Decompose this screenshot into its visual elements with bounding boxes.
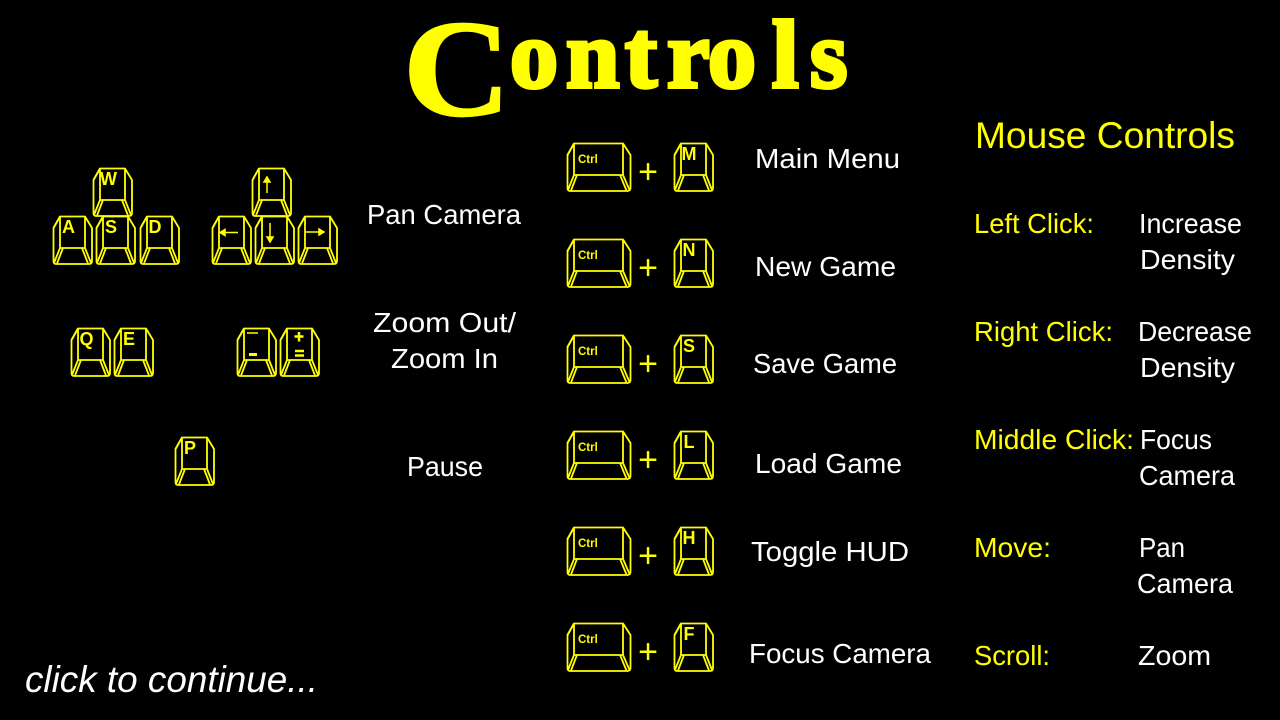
shortcut: ctrl F: F [684, 624, 694, 644]
label: toggle HUD: Toggle HUD [751, 536, 909, 567]
label: zoom: Zoom Out/ [373, 307, 516, 338]
shortcut: ctrl N: N [682, 240, 696, 260]
mouse: middle click: Middle Click: [974, 424, 1134, 455]
mouse: left click: Density [1140, 244, 1235, 275]
shortcut: ctrl L: Ctrl [578, 442, 598, 454]
shortcut: ctrl M: M [682, 144, 696, 164]
mouse: move: Camera [1137, 568, 1233, 599]
shortcut: ctrl F: + [638, 633, 658, 671]
label: new game: New Game [755, 251, 896, 282]
mouse: scroll [974, 640, 1211, 671]
keys: Q and E [72, 328, 153, 376]
title [403, 0, 847, 146]
shortcut: ctrl N [568, 240, 713, 287]
mouse: right click [974, 316, 1252, 383]
shortcut: ctrl S: Ctrl [578, 346, 598, 358]
label: focus camera: Focus Camera [749, 638, 931, 669]
shortcut: ctrl H: + [638, 537, 658, 575]
mouse: left click: Increase [1139, 208, 1242, 239]
shortcut: ctrl N: + [638, 249, 658, 287]
mouse: left click: Left Click: [974, 208, 1094, 239]
shortcut: ctrl N: Ctrl [578, 250, 598, 262]
label: zoom [373, 307, 516, 374]
mouse: right click: Right Click: [974, 316, 1113, 347]
label: pan camera: Pan Camera [367, 199, 521, 230]
heading: mouse controls: Mouse Controls [975, 115, 1235, 156]
mouse: middle click: Camera [1139, 460, 1235, 491]
mouse: right click: Decrease [1138, 316, 1252, 347]
keys: WASD: D [148, 217, 162, 237]
mouse: scroll: Zoom [1138, 640, 1211, 671]
shortcut: ctrl M: + [638, 153, 658, 191]
key: P: P [184, 438, 196, 458]
keys: Q and E: E [123, 329, 135, 349]
shortcut: ctrl L: + [638, 441, 658, 479]
mouse: middle click: Focus [1140, 424, 1212, 455]
label: zoom: Zoom In [391, 343, 498, 374]
shortcut: ctrl F: Ctrl [578, 634, 598, 646]
label: main menu: Main Menu [755, 143, 900, 174]
shortcut: ctrl S [568, 336, 713, 383]
keys: arrows [212, 168, 337, 264]
shortcut: ctrl H [568, 528, 713, 575]
title: ontrols [510, 1, 847, 108]
shortcut: ctrl M [568, 144, 713, 191]
keys: WASD: A [62, 217, 75, 237]
shortcut: ctrl S: + [638, 345, 658, 383]
shortcut: ctrl S: S [683, 336, 695, 356]
shortcut: ctrl H: Ctrl [578, 538, 598, 550]
shortcut: ctrl L [568, 432, 713, 479]
label: save game: Save Game [753, 348, 897, 379]
shortcut: ctrl L: L [684, 432, 694, 452]
keys: WASD: S [105, 217, 117, 237]
mouse: scroll: Scroll: [974, 640, 1050, 671]
mouse: right click: Density [1140, 352, 1235, 383]
mouse: move: Move: [974, 532, 1051, 563]
keys: minus and plus [238, 328, 319, 376]
prompt: click to continue: click to continue... [25, 659, 318, 700]
shortcut: ctrl F [568, 624, 713, 671]
label: load game: Load Game [755, 448, 902, 479]
mouse: move [974, 532, 1233, 599]
mouse: left click [974, 208, 1242, 275]
key: P [176, 438, 214, 485]
shortcut: ctrl H: H [682, 528, 696, 548]
mouse: middle click [974, 424, 1235, 491]
keys: WASD: W [100, 169, 117, 189]
shortcut: ctrl M: Ctrl [578, 154, 598, 166]
keys: WASD [54, 168, 179, 264]
keys: Q and E: Q [79, 329, 94, 349]
label: pause: Pause [407, 451, 483, 482]
mouse: move: Pan [1139, 532, 1185, 563]
